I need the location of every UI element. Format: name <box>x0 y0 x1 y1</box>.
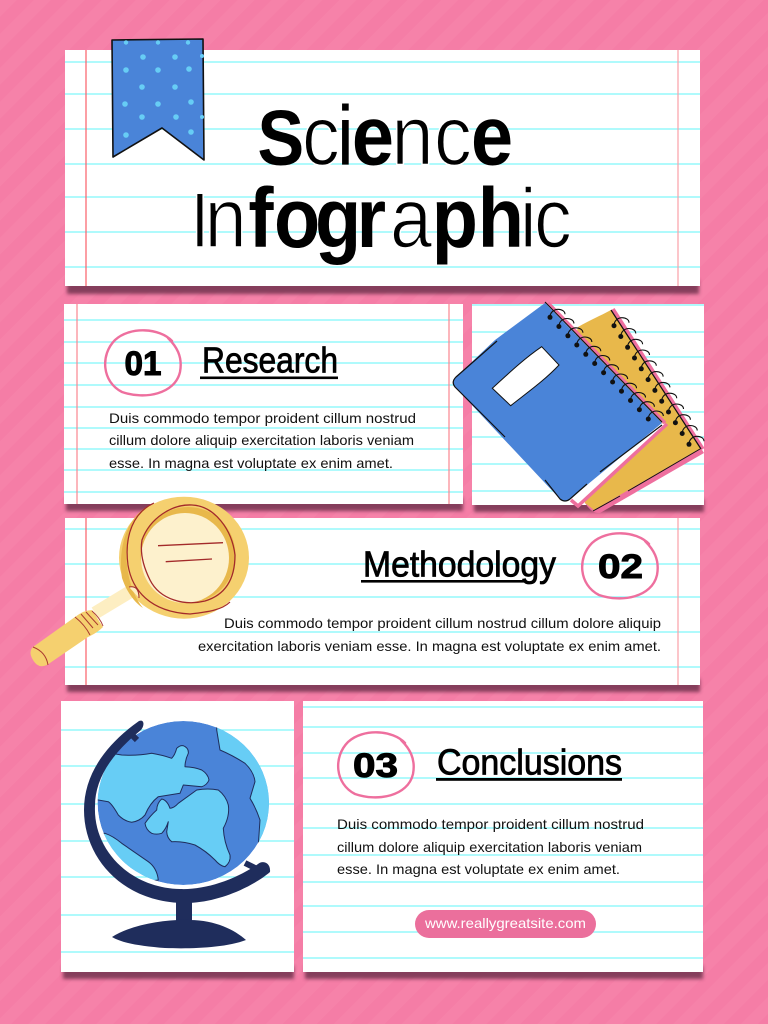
number badge 03: 03 <box>353 747 398 785</box>
rim <box>119 497 249 619</box>
base <box>112 920 246 948</box>
title: n <box>205 171 247 265</box>
title <box>190 89 572 265</box>
title: e <box>352 89 394 182</box>
title: h <box>478 171 524 265</box>
title: c <box>534 171 572 265</box>
handle <box>95 590 133 613</box>
text block: conclusions: esse. In magna est voluptate ex enim amet. <box>337 862 620 877</box>
pink notebook sliver <box>571 420 667 506</box>
title: i <box>520 171 537 265</box>
title: c <box>302 89 340 182</box>
text block: methodology: Duis commodo tempor proident cillum nostrud cillum dolore aliquip <box>224 616 661 631</box>
notebook label <box>492 347 559 406</box>
title: g <box>315 171 361 265</box>
text block: research: Duis commodo tempor proident cillum nostrud <box>109 411 416 426</box>
panel: title sheet <box>65 50 700 294</box>
panel: conclusions <box>303 701 703 979</box>
text block: conclusions: Duis commodo tempor proident cillum nostrud <box>337 817 644 832</box>
title: o <box>274 171 320 265</box>
icon: bookmark ribbon <box>112 39 204 160</box>
stand arc <box>130 733 255 868</box>
lens <box>141 513 229 603</box>
heading: research: Research <box>202 340 338 380</box>
yellow notebook <box>560 309 704 513</box>
heading: methodology: Methodology <box>363 544 556 584</box>
icon: globe <box>84 720 285 948</box>
title: n <box>392 89 434 182</box>
title: e <box>471 89 513 182</box>
sphere <box>98 721 269 885</box>
title: I <box>190 177 210 264</box>
title: a <box>390 171 433 265</box>
title: f <box>248 171 274 265</box>
panel: research <box>64 304 463 511</box>
stem <box>176 900 192 926</box>
heading: conclusions: Conclusions <box>437 742 622 782</box>
website pill <box>415 910 596 938</box>
number badge 02 <box>582 533 658 598</box>
title: r <box>357 171 386 265</box>
title: p <box>432 171 478 265</box>
title: c <box>434 89 472 182</box>
number badge 03 <box>338 732 414 797</box>
panel: methodology <box>65 518 700 692</box>
number badge 02: 02 <box>598 548 643 586</box>
blue notebook <box>453 302 665 501</box>
icon: magnifying glass <box>30 497 249 666</box>
text block: conclusions <box>337 817 644 877</box>
text block: research <box>109 411 416 471</box>
text block: research: esse. In magna est voluptate ex enim amet. <box>109 456 393 471</box>
panel: notebook sheet <box>472 304 704 512</box>
title: S <box>257 94 304 181</box>
text block: research: cillum dolore aliquip exercitation laboris veniam <box>109 433 414 448</box>
text block: methodology: exercitation laboris veniam esse. In magna est voluptate ex enim amet. <box>198 639 661 654</box>
number badge 01 <box>105 330 181 395</box>
title: i <box>337 89 354 182</box>
text block: conclusions: cillum dolore aliquip exercitation laboris veniam <box>337 840 642 855</box>
number badge 01: 01 <box>124 345 162 383</box>
text block: methodology <box>198 616 661 654</box>
website pill: www.reallygreatsite.com <box>424 916 586 931</box>
panel: globe sheet <box>61 701 294 979</box>
icon: notebooks <box>453 302 704 513</box>
